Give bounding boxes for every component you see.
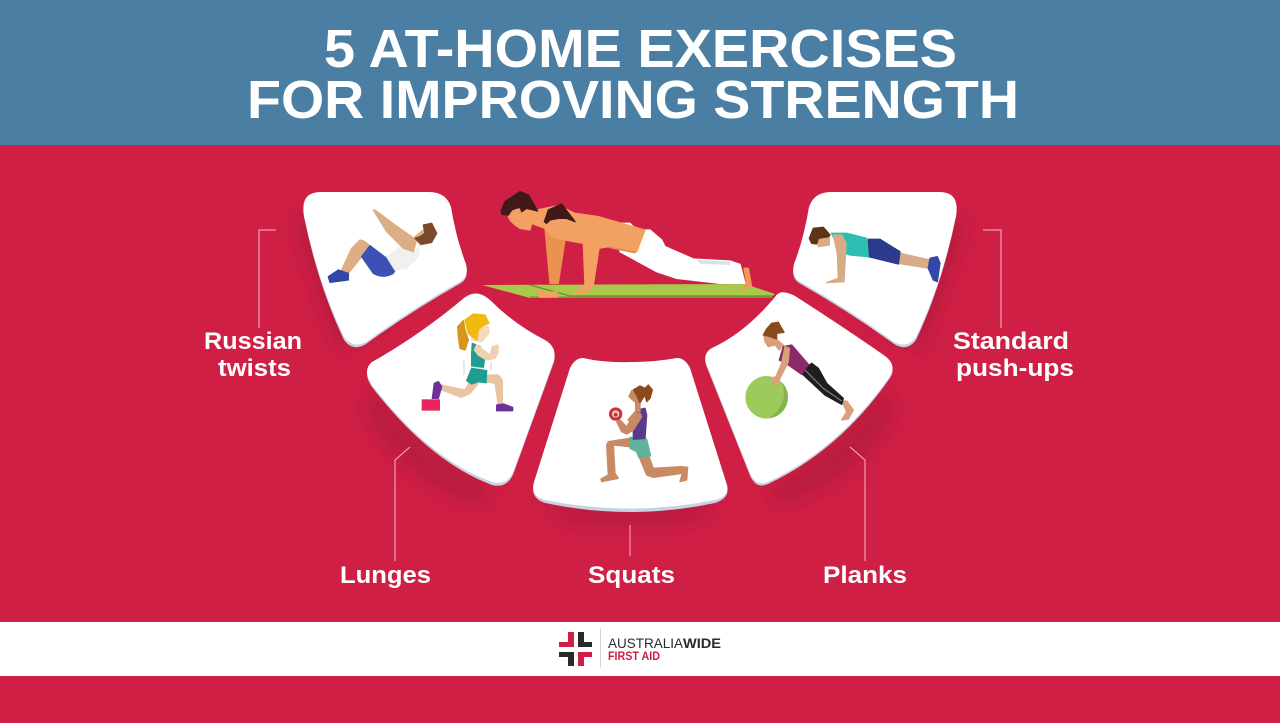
logo: Australia Wide First Aid	[559, 628, 721, 668]
card: Russian twists	[303, 192, 467, 347]
label: Standard push-ups: push-ups	[956, 355, 1074, 382]
card: Standard push-ups	[793, 192, 957, 347]
label: Standard push-ups: Standard	[953, 328, 1069, 355]
red background	[0, 145, 1280, 723]
card: Lunges	[367, 293, 555, 486]
footer band	[0, 622, 1280, 676]
logo wordmark	[608, 635, 721, 663]
card: Planks	[705, 292, 893, 486]
label: Standard push-ups	[953, 328, 1074, 382]
icon: medical cross	[559, 632, 592, 666]
leader line: Standard push-ups	[983, 230, 1001, 328]
label: Squats: Squats	[588, 562, 675, 589]
label: Russian twists: Russian	[204, 328, 302, 355]
figure: woman with weight ball	[601, 385, 688, 482]
figure: man doing push-up	[809, 227, 940, 283]
exercise mat	[482, 284, 775, 298]
trousers and foot	[620, 223, 752, 290]
leader line: Squats	[629, 525, 631, 556]
figure: girl lunging	[422, 314, 513, 411]
card shadows	[292, 215, 968, 525]
figure: woman on exercise ball	[745, 322, 853, 420]
logo wordmark: FIRST AID	[608, 649, 660, 663]
logo wordmark: AUSTRALIA	[608, 635, 684, 651]
leader line: Russian twists	[259, 230, 276, 328]
leader line: Planks	[850, 447, 865, 561]
title banner	[0, 0, 1280, 145]
logo wordmark: WIDE	[683, 635, 721, 651]
figure: man doing twists	[328, 210, 437, 282]
leader line: Lunges	[395, 447, 410, 561]
label: Russian twists: twists	[218, 355, 291, 382]
label: Lunges: Lunges	[340, 562, 431, 589]
title banner: FOR IMPROVING STRENGTH	[247, 70, 1019, 130]
label: Russian twists	[204, 328, 302, 382]
card: Squats	[533, 358, 728, 512]
main illustration: man doing push-up on mat	[482, 192, 775, 298]
title banner: 5 AT-HOME EXERCISES	[324, 19, 957, 79]
label: Planks: Planks	[823, 562, 907, 589]
upper body	[501, 192, 645, 297]
